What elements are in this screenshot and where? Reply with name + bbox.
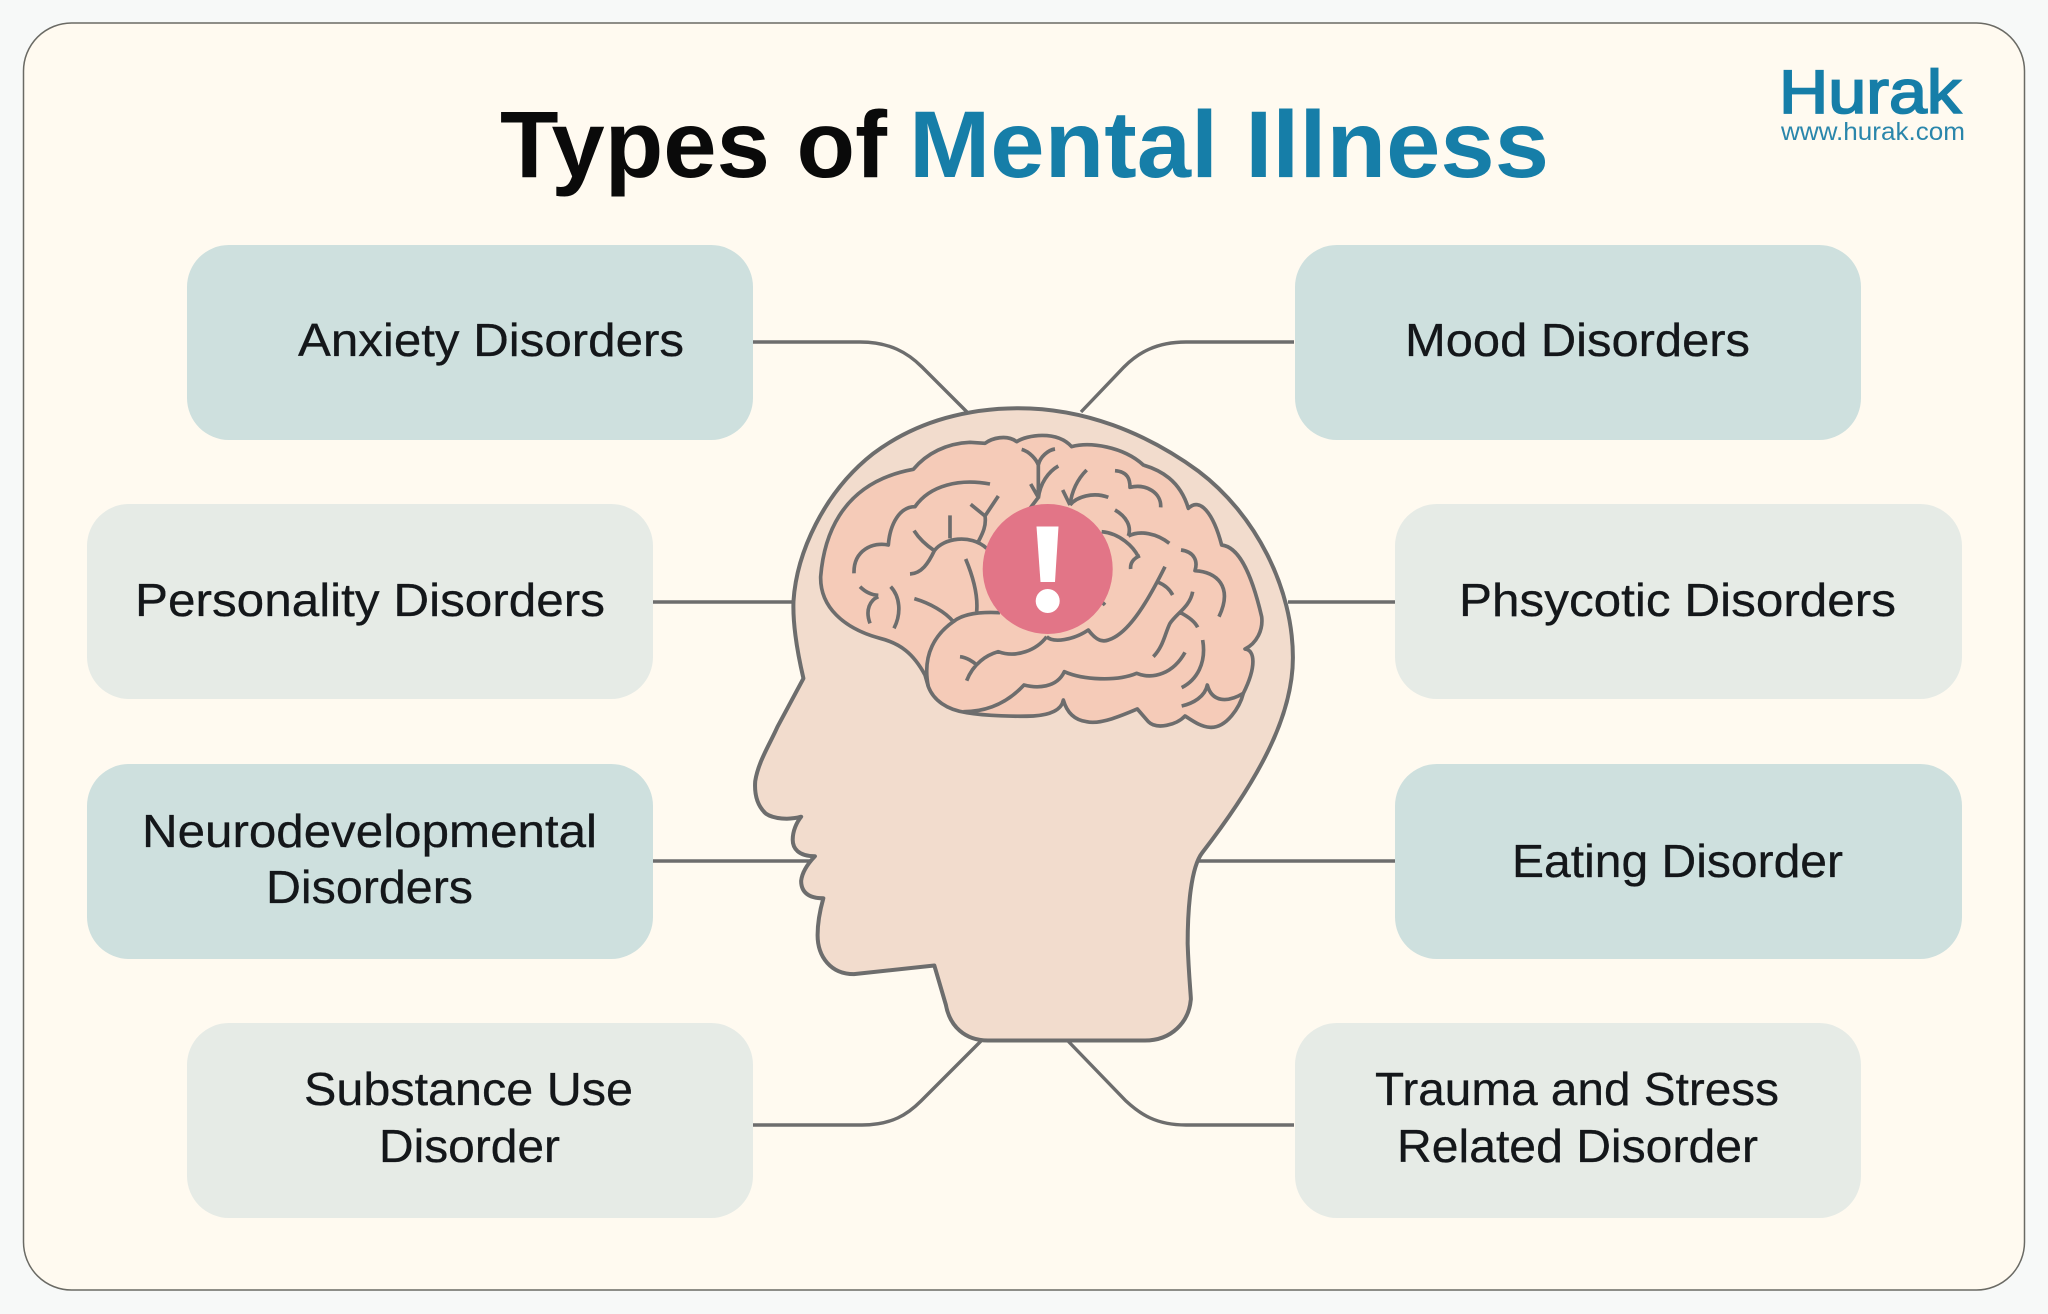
panel: Anxiety Disorders bbox=[187, 245, 753, 440]
logo wordmark: Hurak bbox=[1779, 58, 1962, 126]
panel: Personality Disorders bbox=[87, 504, 653, 699]
logo: Hurak bbox=[1779, 58, 1965, 146]
label: Personality Disorders bbox=[135, 574, 605, 626]
label: Related Disorder bbox=[1397, 1120, 1758, 1172]
panel: Neurodevelopmental Disorders bbox=[87, 764, 653, 959]
panel: Trauma and Stress Related Disorder bbox=[1295, 1023, 1861, 1218]
icon: brain bbox=[821, 435, 1262, 727]
label: Neurodevelopmental bbox=[142, 805, 597, 857]
title: Types of bbox=[500, 92, 887, 198]
label: Eating Disorder bbox=[1512, 835, 1843, 887]
title bbox=[500, 92, 1549, 198]
icon: alert badge bbox=[983, 504, 1113, 634]
label: Substance Use bbox=[304, 1063, 633, 1115]
label: Phsycotic Disorders bbox=[1459, 574, 1896, 626]
panel: Mood Disorders bbox=[1295, 245, 1861, 440]
label: Trauma and Stress bbox=[1375, 1063, 1779, 1115]
label: Anxiety Disorders bbox=[298, 314, 684, 366]
label bbox=[142, 805, 597, 913]
label: Mood Disorders bbox=[1405, 314, 1750, 366]
panel: Eating Disorder bbox=[1395, 764, 1962, 959]
logo url: www.hurak.com bbox=[1780, 118, 1965, 146]
icon: head silhouette bbox=[755, 408, 1293, 1041]
label: Disorders bbox=[266, 861, 473, 913]
label bbox=[1375, 1063, 1779, 1172]
label: Disorder bbox=[379, 1120, 560, 1172]
title: Mental Illness bbox=[909, 92, 1549, 198]
panel: Substance Use Disorder bbox=[187, 1023, 753, 1218]
panel: Phsycotic Disorders bbox=[1395, 504, 1962, 699]
connector lines bbox=[653, 342, 1395, 1125]
label bbox=[304, 1063, 633, 1172]
